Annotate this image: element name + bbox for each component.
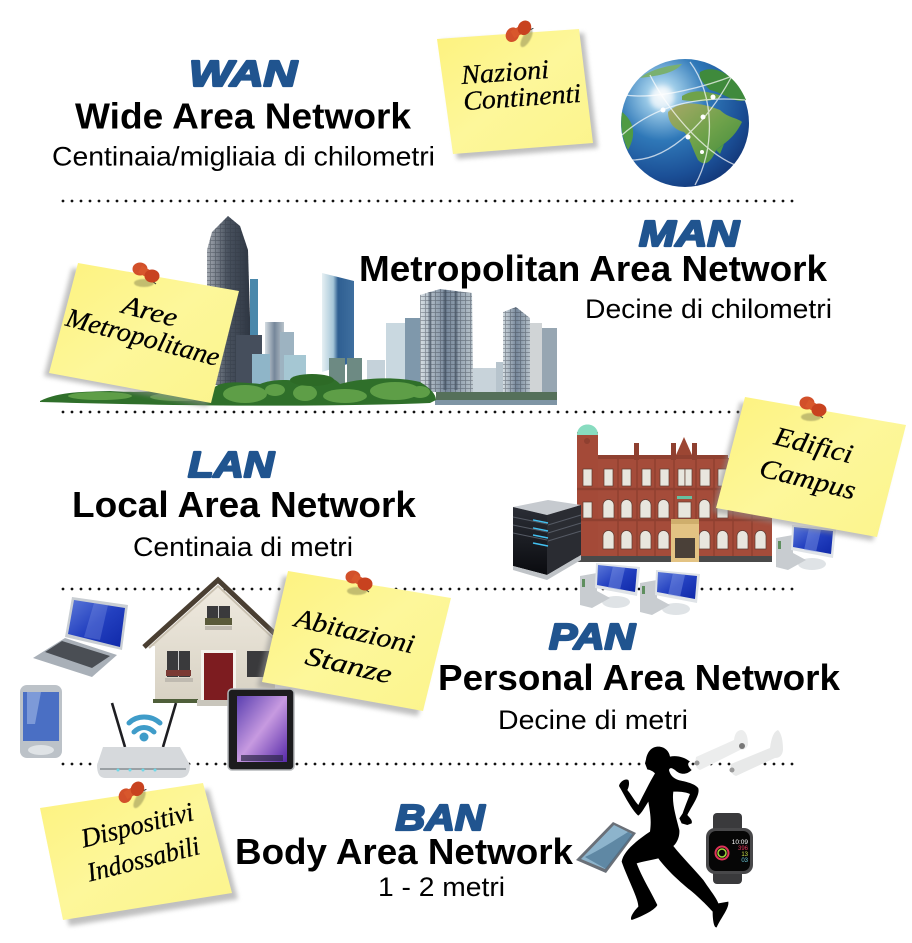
- sticky note: Aree Metropolitane: Aree: [117, 289, 181, 333]
- sticky note: Abitazioni Stanze: Stanze: [303, 640, 395, 689]
- icon: tablet: [228, 689, 294, 770]
- text: MAN range: Decine di chilometri: [585, 294, 832, 324]
- sticky note: Nazioni Continenti: [437, 15, 598, 159]
- text: LAN range: Centinaia di metri: [133, 532, 353, 562]
- icon: campus building: [576, 424, 772, 562]
- heading: Body Area Network: Body Area Network: [235, 831, 574, 872]
- section: WAN text: [52, 53, 435, 172]
- heading: BAN: BAN: [396, 797, 486, 838]
- icon: smartwatch: [706, 813, 753, 884]
- section: BAN text: [235, 797, 574, 902]
- sticky note: Edifici Campus: [712, 396, 906, 541]
- sticky note: Edifici Campus: Campus: [757, 453, 859, 505]
- icon: house: [144, 580, 277, 706]
- sticky note: Aree Metropolitane: Metropolitane: [62, 302, 223, 372]
- icon: smartwatch: 13: [741, 852, 749, 858]
- sticky note: Abitazioni Stanze: [257, 570, 451, 716]
- sticky note: Aree Metropolitane: [44, 262, 239, 407]
- icon: smartwatch: 10:09: [732, 839, 748, 846]
- section: LAN text: [72, 444, 417, 562]
- icon: running woman silhouette: [619, 747, 728, 927]
- sticky note: Dispositivi Indossabili: [40, 776, 238, 926]
- sticky note: Dispositivi Indossabili: Indossabili: [83, 831, 203, 888]
- icon: PDA phone: [20, 685, 62, 758]
- text: PAN range: Decine di metri: [498, 705, 688, 735]
- icon: globe: [621, 59, 749, 187]
- icon: laptop: [33, 597, 128, 677]
- sticky note: Nazioni Continenti: Continenti: [462, 78, 582, 116]
- icon: earbuds: [694, 730, 783, 776]
- image: city skyline: [40, 216, 557, 406]
- icon: smartwatch: 03: [741, 858, 749, 864]
- icons: desktop computers: [580, 525, 836, 615]
- icon: server: [513, 500, 581, 580]
- section: MAN heading: [585, 213, 832, 324]
- heading: Personal Area Network: Personal Area Network: [438, 657, 841, 698]
- section: PAN text: [438, 616, 841, 735]
- text: WAN range: Centinaia/migliaia di chilometri: [52, 142, 435, 172]
- heading: Local Area Network: Local Area Network: [72, 484, 417, 525]
- heading: PAN: PAN: [549, 616, 636, 657]
- heading: MAN: MAN: [639, 213, 740, 254]
- heading: Metropolitan Area Network: Metropolitan Area Network: [359, 248, 828, 289]
- icon: smartphone: [576, 822, 636, 873]
- sticky note: Nazioni Continenti: Nazioni: [459, 54, 550, 90]
- sticky note: Abitazioni Stanze: Abitazioni: [290, 602, 418, 659]
- dotted dividers: [63, 201, 796, 764]
- heading: WAN: WAN: [189, 53, 298, 94]
- heading: Wide Area Network: Wide Area Network: [75, 96, 412, 136]
- icon: smartwatch: 396: [738, 846, 749, 852]
- icon: wifi router: [97, 703, 190, 778]
- heading: LAN: LAN: [188, 444, 275, 485]
- sticky note: Edifici Campus: Edifici: [770, 420, 856, 469]
- text: BAN range: 1 - 2 metri: [378, 872, 505, 902]
- sticky note: Dispositivi Indossabili: Dispositivi: [77, 797, 197, 854]
